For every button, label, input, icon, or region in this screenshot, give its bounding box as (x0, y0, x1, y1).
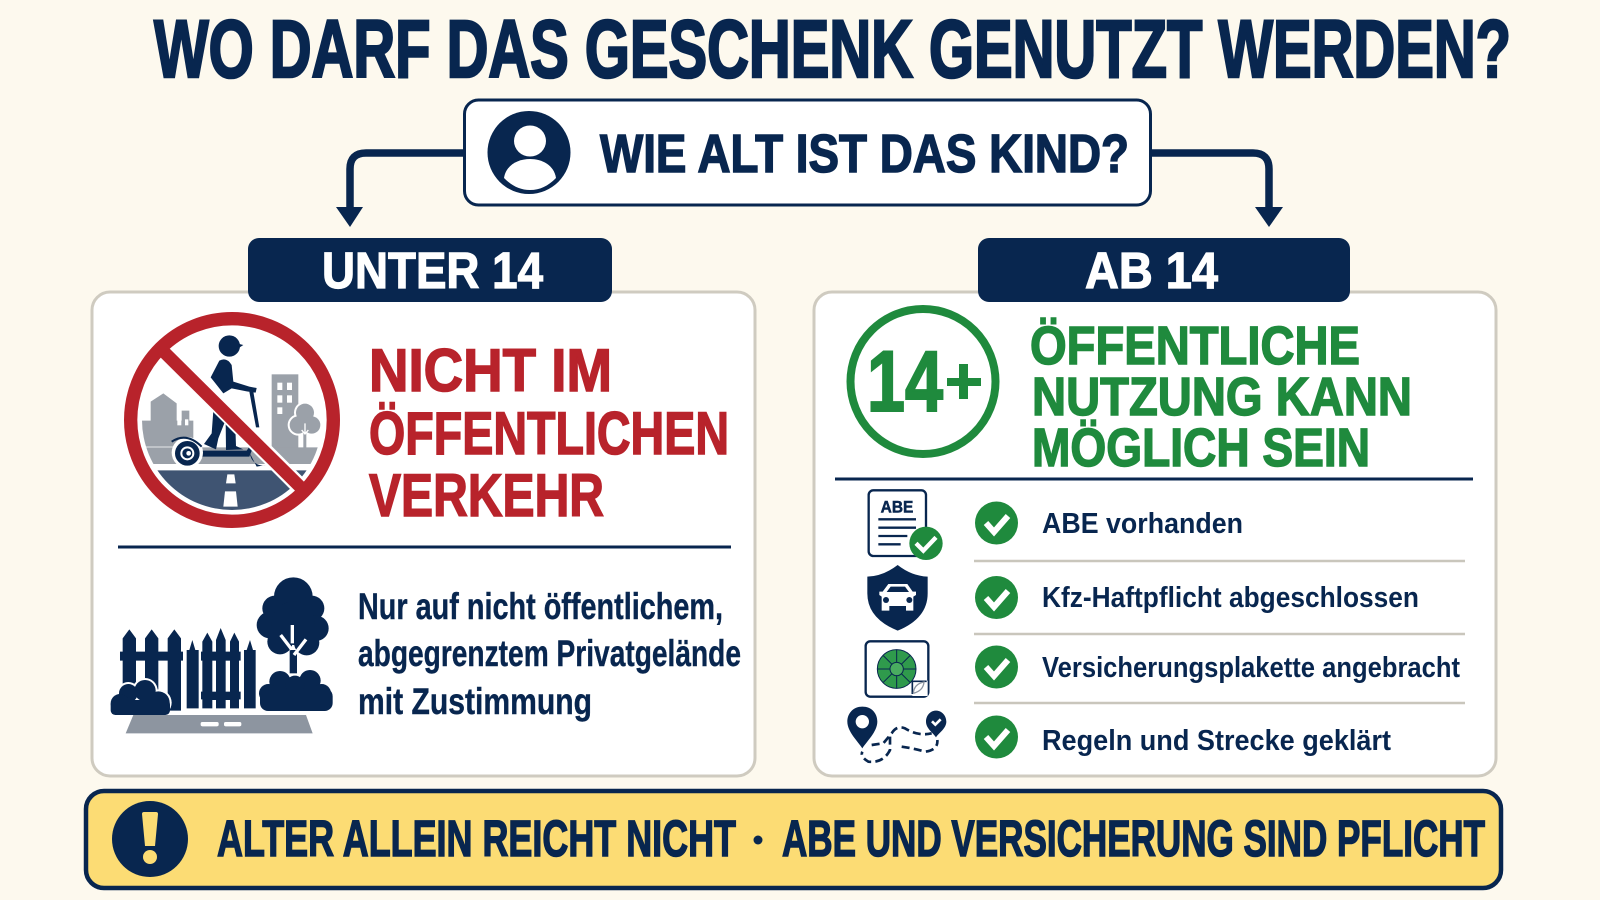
icon: ABE document (869, 490, 943, 560)
question box (464, 100, 1150, 205)
check item: Regeln: Regeln und Strecke geklärt (1042, 725, 1391, 757)
check item: Plakette: Versicherungsplakette angebracht (1042, 652, 1460, 684)
banner text: ALTER ALLEIN REICHT NICHT (217, 810, 736, 867)
red heading (369, 337, 729, 529)
check item: ABE (975, 502, 1243, 544)
question text: WIE ALT IST DAS KIND? (600, 124, 1129, 184)
icon: exclamation mark (112, 801, 188, 877)
private ground text (358, 586, 741, 722)
check item: Plakette (975, 646, 1460, 688)
arrow: question to ab 14 (1151, 153, 1283, 227)
check item: Kfz (975, 576, 1419, 619)
checklist (974, 502, 1465, 758)
icon: no scooter sign (131, 319, 333, 523)
private ground text: mit Zustimmung (358, 681, 592, 722)
panel: ab 14 (814, 238, 1496, 776)
red heading: NICHT IM (369, 337, 612, 404)
red heading: VERKEHR (369, 462, 604, 529)
header pill: unter 14: UNTER 14 (322, 242, 544, 299)
icon: ABE document: ABE (881, 497, 913, 516)
header pill: unter 14 (248, 238, 612, 302)
private ground text: Nur auf nicht öffentlichem, (358, 586, 723, 627)
warning banner (86, 791, 1501, 888)
icon: fence and tree (109, 577, 333, 733)
check item: ABE: ABE vorhanden (1042, 508, 1243, 540)
green heading: MÖGLICH SEIN (1032, 418, 1370, 478)
red heading: ÖFFENTLICHEN (369, 400, 729, 467)
icon: 14+ badge (850, 309, 996, 454)
icon: shield with car (867, 565, 928, 631)
icon: route with pins (847, 707, 946, 762)
icon: person (488, 111, 570, 194)
header pill: ab 14 (978, 238, 1350, 302)
private ground text: abgegrenztem Privatgelände (358, 633, 741, 674)
green heading: NUTZUNG KANN (1032, 367, 1412, 427)
green heading: ÖFFENTLICHE (1030, 316, 1360, 376)
header pill: ab 14: AB 14 (1085, 242, 1219, 299)
panel: unter 14 (92, 238, 755, 776)
icon: insurance plate (866, 641, 928, 697)
check item: Regeln (975, 716, 1391, 758)
arrow: question to under 14 (336, 153, 463, 227)
green heading (1030, 316, 1412, 478)
check item: Kfz: Kfz-Haftpflicht abgeschlossen (1042, 582, 1419, 614)
icon: 14+ badge: 14 (867, 334, 943, 430)
banner text (217, 810, 1485, 867)
